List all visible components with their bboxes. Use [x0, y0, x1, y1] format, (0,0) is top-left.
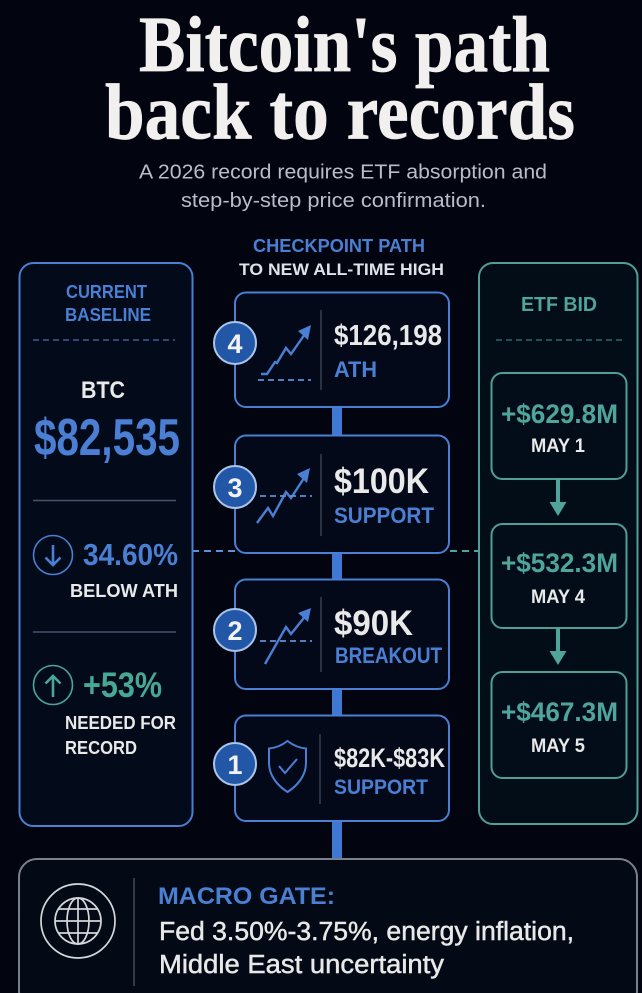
icon: down arrow	[34, 536, 72, 574]
BTC price: $82,535	[34, 409, 180, 467]
badge 2	[214, 609, 256, 651]
icon: rising chart over level	[257, 468, 312, 523]
macro gate text: Middle East uncertainty	[159, 951, 444, 979]
timeline connector	[332, 407, 342, 859]
flow: May 5	[492, 672, 626, 778]
icon: up arrow	[34, 666, 72, 704]
stat: below ATH: BELOW ATH	[70, 580, 178, 601]
flow: May 4	[492, 524, 626, 628]
heading: ETF bid: ETF BID	[521, 294, 597, 316]
value: SUPPORT	[334, 776, 428, 799]
icon: shield check	[269, 741, 306, 792]
checkpoint 2: $90K breakout	[214, 580, 449, 689]
macro gate text: MACRO GATE:	[158, 883, 335, 910]
badge 3	[214, 466, 256, 508]
flow: May 1	[492, 373, 626, 479]
panel: ETF bid	[479, 263, 638, 824]
arrow	[550, 479, 566, 516]
BTC price: BTC	[81, 377, 125, 404]
center column heading: CHECKPOINT PATH	[253, 236, 425, 256]
flow: May 5: MAY 5	[531, 735, 585, 757]
macro gate text	[158, 883, 574, 979]
heading: current baseline	[65, 281, 151, 325]
badge 4: 4	[227, 329, 243, 359]
title: back to records	[105, 70, 575, 156]
subtitle: step-by-step price confirmation.	[181, 190, 486, 212]
badge 3: 3	[227, 473, 243, 503]
value: $126,198	[334, 320, 442, 352]
icon: rising chart	[258, 325, 311, 380]
stat: needed for record	[65, 666, 176, 758]
icon: globe	[41, 884, 115, 958]
title	[105, 2, 575, 156]
icon: breakout chart	[260, 608, 312, 664]
value: $90K	[334, 604, 413, 643]
stat: below ATH: 34.60%	[83, 537, 178, 572]
value: BREAKOUT	[335, 643, 442, 668]
value: SUPPORT	[334, 503, 435, 528]
checkpoint 3: $100K support	[214, 436, 449, 553]
title: Bitcoin's path	[139, 2, 550, 89]
value	[334, 743, 445, 799]
flow: May 4: MAY 4	[531, 586, 585, 608]
value	[334, 320, 442, 382]
heading: current baseline: BASELINE	[65, 304, 151, 325]
flow: May 1: +$629.8M	[501, 399, 618, 429]
subtitle: A 2026 record requires ETF absorption and	[139, 162, 547, 184]
checkpoint 1: support zone	[214, 716, 449, 821]
badge 1: 1	[227, 750, 243, 780]
badge 4	[214, 322, 256, 364]
value: ATH	[334, 357, 377, 382]
value	[334, 462, 435, 528]
value	[334, 604, 442, 668]
stat: below ATH	[70, 537, 178, 601]
connector dashes between panels	[192, 550, 479, 552]
panel: macro gate	[19, 859, 637, 993]
stat: needed for record: +53%	[83, 666, 162, 705]
stat: needed for record: NEEDED FOR	[65, 712, 176, 733]
subtitle	[139, 162, 547, 212]
badge 1	[214, 743, 256, 785]
stat: needed for record: RECORD	[65, 737, 137, 758]
center column heading: TO NEW ALL-TIME HIGH	[239, 260, 444, 279]
center column heading	[239, 236, 444, 279]
flow: May 4: +$532.3M	[501, 548, 618, 578]
panel: current baseline	[20, 263, 192, 826]
value: $100K	[334, 462, 429, 501]
heading: current baseline: CURRENT	[66, 281, 148, 302]
BTC price	[34, 377, 180, 467]
macro gate text: Fed 3.50%-3.75%, energy inflation,	[159, 918, 574, 946]
badge 2: 2	[227, 616, 243, 646]
flow: May 1: MAY 1	[531, 435, 585, 457]
value: $82K-$83K	[334, 743, 445, 773]
flow: May 5: +$467.3M	[501, 697, 618, 727]
arrow	[550, 628, 566, 665]
checkpoint 4: ATH	[214, 292, 449, 407]
